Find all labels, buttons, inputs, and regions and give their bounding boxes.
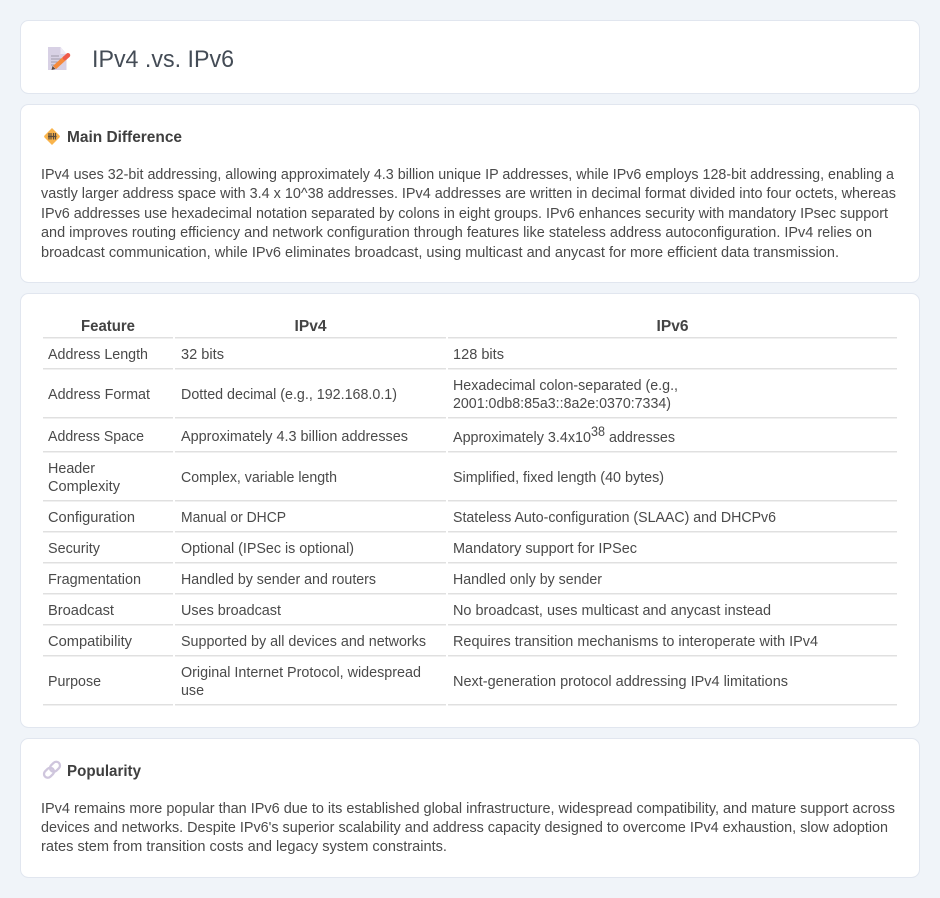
icon: chain link bbox=[42, 760, 62, 779]
row: header complexity: Complex, variable length bbox=[181, 470, 337, 486]
row: compatibility: Requires transition mechanisms to interoperate with IPv4 bbox=[453, 634, 818, 650]
row: header complexity bbox=[48, 461, 664, 495]
row: compatibility: Compatibility bbox=[48, 634, 133, 650]
paragraph: main difference: vastly larger address space with 3.4 x 10^38 addresses. IPv4 addresses are written in decimal format divided into four octets, whereas bbox=[41, 186, 896, 202]
row: purpose: Original Internet Protocol, widespread bbox=[181, 665, 421, 681]
row: compatibility bbox=[48, 634, 818, 650]
row: header complexity: Simplified, fixed length (40 bytes) bbox=[453, 470, 664, 486]
row: broadcast: Uses broadcast bbox=[181, 603, 281, 619]
row: configuration: Configuration bbox=[48, 510, 135, 526]
paragraph: main difference: IPv4 uses 32-bit addressing, allowing approximately 4.3 billion unique IP addresses, while IPv6 employs 128-bit addressing, enabling a bbox=[41, 167, 894, 183]
row: address format: 2001:0db8:85a3::8a2e:0370:7334) bbox=[453, 396, 671, 412]
row: configuration: Stateless Auto-configuration (SLAAC) and DHCPv6 bbox=[453, 510, 776, 526]
row: purpose: use bbox=[181, 683, 204, 699]
row: address length bbox=[48, 347, 504, 363]
row: broadcast: No broadcast, uses multicast and anycast instead bbox=[453, 603, 771, 619]
row: security: Security bbox=[48, 541, 101, 557]
row: address space: Approximately 3.4x10 bbox=[453, 430, 591, 446]
row: broadcast: Broadcast bbox=[48, 603, 114, 619]
row: address format bbox=[48, 378, 678, 412]
table header bbox=[81, 318, 689, 335]
row: header complexity: Complexity bbox=[48, 479, 121, 495]
row: configuration bbox=[48, 510, 776, 526]
title text: IPv4 .vs. IPv6 bbox=[92, 46, 234, 73]
paragraph: popularity: devices and networks. Despite IPv6's superior scalability and address capacity designed to overcome IPv4 exhaustion, slow adoption bbox=[41, 820, 888, 836]
row: purpose: Purpose bbox=[48, 674, 101, 690]
paragraph: main difference: IPv6 addresses use hexadecimal notation separated by colons in eight groups. IPv6 enhances security with mandatory IPsec support bbox=[41, 206, 888, 222]
row: address space: Address Space bbox=[48, 429, 144, 445]
row: address format: Hexadecimal colon-separated (e.g., bbox=[453, 378, 678, 394]
row: compatibility: Supported by all devices and networks bbox=[181, 634, 426, 650]
paragraph: popularity bbox=[41, 801, 895, 855]
paragraph: popularity: IPv4 remains more popular than IPv6 due to its established global infrastructure, widespread compatibility, and mature support across bbox=[41, 801, 895, 817]
row: fragmentation: Handled by sender and routers bbox=[181, 572, 376, 588]
row: fragmentation bbox=[48, 572, 602, 588]
row: address space: Approximately 4.3 billion addresses bbox=[181, 429, 408, 445]
panel: popularity bbox=[20, 738, 920, 878]
row: address format: Address Format bbox=[48, 387, 150, 403]
paragraph: main difference: broadcast communication, while IPv6 eliminates broadcast, using multicast and anycast for more efficient data transmission. bbox=[41, 245, 839, 261]
row: purpose bbox=[48, 665, 788, 699]
row: security: Optional (IPSec is optional) bbox=[181, 541, 354, 557]
panel: comparison table bbox=[20, 294, 920, 728]
paragraph: main difference: and improves routing efficiency and network configuration through features like stateless address autoconfiguration. IPv4 relies on bbox=[41, 225, 872, 241]
paragraph: main difference bbox=[41, 167, 896, 261]
row: address space: addresses bbox=[609, 430, 675, 446]
table header: Feature bbox=[81, 318, 135, 335]
panel: main difference bbox=[20, 104, 920, 282]
row: configuration: Manual or DHCP bbox=[181, 510, 286, 526]
row: fragmentation: Fragmentation bbox=[48, 572, 141, 588]
paragraph: popularity: rates stem from transition costs and legacy system constraints. bbox=[41, 839, 447, 855]
row: address length: Address Length bbox=[48, 347, 148, 363]
icon: document with pencil bbox=[48, 47, 68, 70]
row: address length: 32 bits bbox=[181, 347, 224, 363]
icon: warning diamond bbox=[44, 128, 60, 145]
row: address space bbox=[48, 424, 675, 446]
row: address length: 128 bits bbox=[453, 347, 504, 363]
row: address space: 38 bbox=[591, 424, 605, 439]
heading: main difference: Main Difference bbox=[67, 129, 182, 146]
row: fragmentation: Handled only by sender bbox=[453, 572, 602, 588]
heading: popularity: Popularity bbox=[67, 763, 141, 780]
table header: IPv6 bbox=[656, 318, 689, 335]
row: security: Mandatory support for IPSec bbox=[453, 541, 637, 557]
panel: title bbox=[20, 20, 920, 94]
row: header complexity: Header bbox=[48, 461, 95, 477]
row: address format: Dotted decimal (e.g., 192.168.0.1) bbox=[181, 387, 397, 403]
row: broadcast bbox=[48, 603, 771, 619]
table header: IPv4 bbox=[294, 318, 327, 335]
row: security bbox=[48, 541, 637, 557]
row: purpose: Next-generation protocol addressing IPv4 limitations bbox=[453, 674, 788, 690]
